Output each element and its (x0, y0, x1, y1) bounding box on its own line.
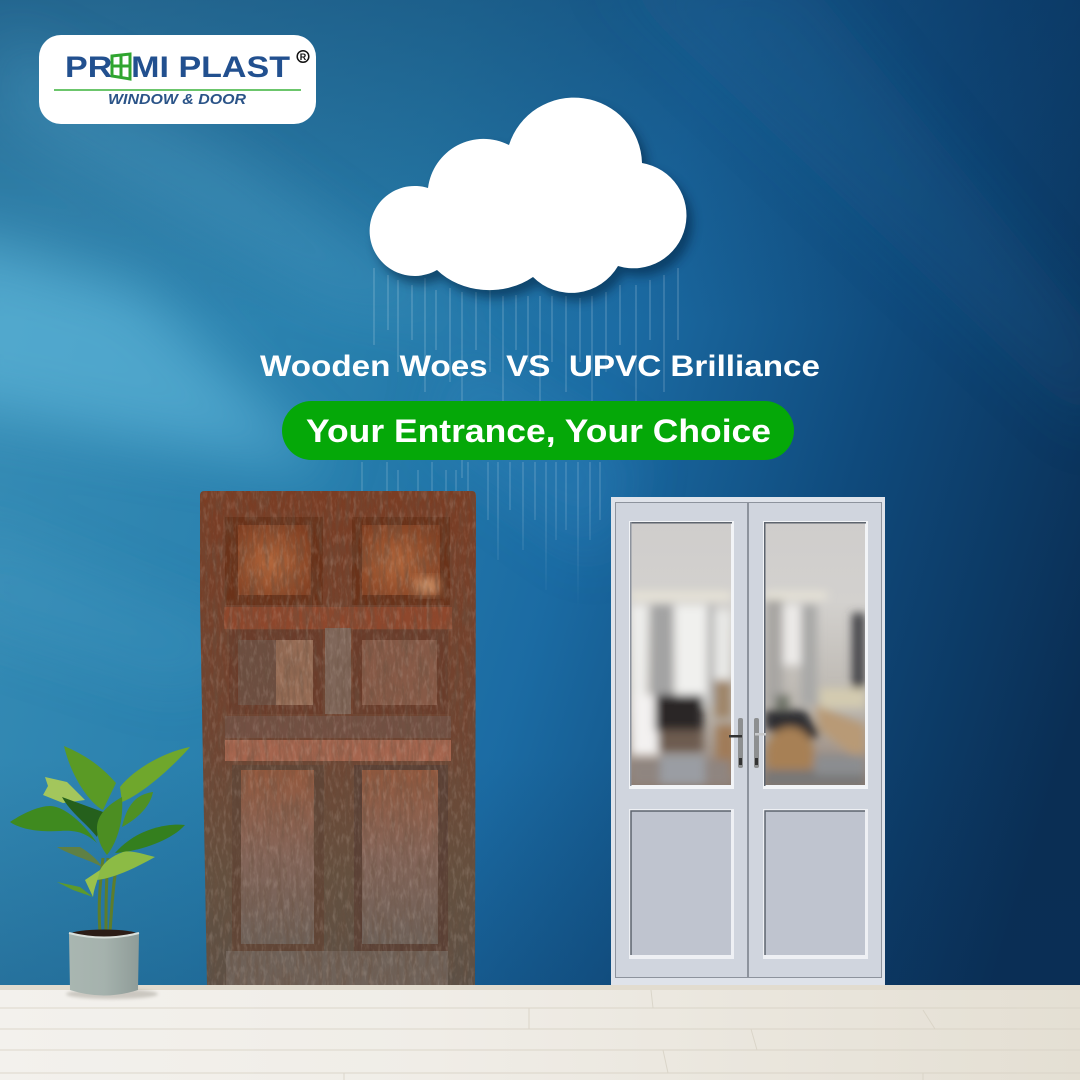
bottom right panel (354, 765, 448, 951)
bottom left panel (232, 765, 324, 951)
right glass (763, 521, 868, 789)
big left leaf (10, 806, 97, 843)
lower rails (225, 716, 451, 738)
logo tagline: WINDOW & DOOR (108, 92, 247, 108)
center leaf (97, 797, 122, 855)
leaves (10, 746, 190, 897)
left leaf (616, 503, 747, 977)
upper right leaf (120, 747, 190, 802)
pale lower leaf (97, 851, 155, 880)
upper rail (224, 607, 452, 629)
pale leaf (43, 777, 85, 803)
right small leaf (122, 792, 153, 827)
potted plant (10, 746, 190, 999)
top left panel (225, 517, 323, 605)
logo wordmark: PR MI PLAST (65, 51, 290, 84)
pot shadow (66, 989, 158, 999)
floor (0, 985, 1080, 1080)
upper left leaf (64, 746, 116, 810)
right leaf (749, 503, 881, 977)
middle left panel (229, 630, 323, 714)
thin silver leaf (57, 847, 102, 867)
dark leaf (62, 797, 103, 837)
registered mark: R (300, 52, 307, 62)
door handles (729, 718, 766, 768)
pot (69, 933, 139, 996)
right lower panel (763, 809, 868, 959)
stems (99, 858, 116, 932)
heading: Wooden Woes VS UPVC Brilliance (260, 350, 820, 383)
bottom rail (226, 951, 448, 985)
UPVC double door (611, 497, 885, 985)
left glass (629, 521, 736, 789)
mid mullion (325, 628, 351, 714)
rain streaks (362, 268, 678, 610)
cloud (370, 98, 692, 301)
green pill subtitle (282, 401, 794, 460)
wooden door (200, 491, 476, 985)
logo window icon (112, 54, 130, 79)
left lower panel (629, 809, 734, 959)
logo badge (39, 35, 316, 124)
lower right leaf (115, 825, 185, 853)
middle right panel (353, 630, 448, 714)
small lower leaf (57, 882, 93, 897)
top right panel (352, 517, 450, 605)
green pill subtitle: Your Entrance, Your Choice (306, 413, 771, 449)
registered mark (297, 51, 309, 62)
wood grain (200, 491, 476, 985)
soil (71, 930, 137, 938)
